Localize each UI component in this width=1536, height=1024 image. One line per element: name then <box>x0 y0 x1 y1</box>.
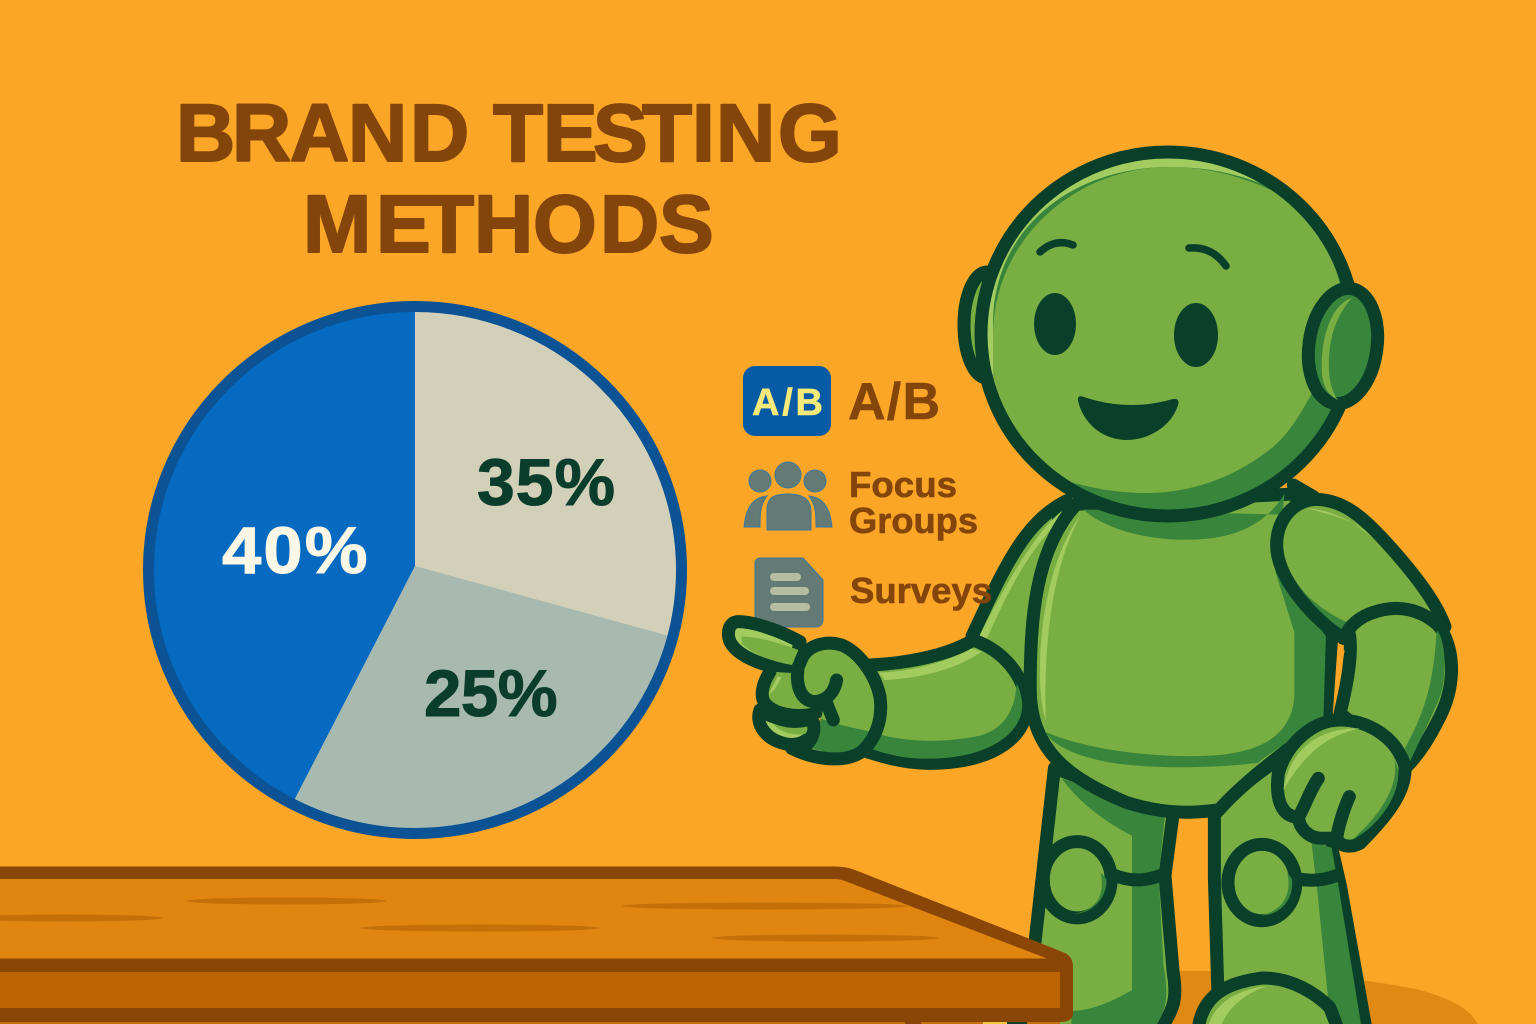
ring finger <box>759 710 814 744</box>
left ear <box>964 272 1010 378</box>
floor shadow <box>1130 971 1478 1024</box>
title: METHODS <box>303 179 714 270</box>
palm <box>792 643 881 759</box>
label: 40%: 40% <box>222 514 368 587</box>
resting hand <box>1277 720 1405 846</box>
right ear <box>1301 284 1385 408</box>
pointing arm and hand <box>728 622 1027 763</box>
icon: focus group people <box>744 462 832 530</box>
label: A/B: A/B <box>848 373 940 431</box>
robot character <box>728 140 1452 1024</box>
label: 35%: 35% <box>477 446 615 520</box>
left leg <box>1030 768 1175 1024</box>
label: Focus Groups: Focus <box>849 464 957 505</box>
face <box>993 167 1340 493</box>
slice: 25% <box>295 566 668 828</box>
pie chart <box>143 301 687 839</box>
right forearm <box>1340 608 1452 767</box>
shoulder strap <box>1293 485 1313 497</box>
head <box>980 140 1355 520</box>
table top <box>0 879 1047 958</box>
label: Surveys: Surveys <box>850 570 992 611</box>
mouth <box>1078 396 1178 440</box>
label: Focus Groups <box>849 464 978 541</box>
index finger <box>728 622 800 672</box>
right arm <box>1277 485 1452 846</box>
table front <box>0 972 1060 1008</box>
wood grain <box>0 898 938 942</box>
eyebrows <box>1040 243 1226 266</box>
table <box>0 866 1073 1024</box>
label: 25%: 25% <box>424 658 558 731</box>
label: Focus Groups: Groups <box>849 500 978 541</box>
icon: A/B badge <box>743 366 831 436</box>
gap between arm and torso <box>1338 648 1345 680</box>
icon: A/B badge: A/B <box>752 382 823 424</box>
right leg <box>1197 754 1367 1024</box>
slice: 40% <box>154 312 415 799</box>
icon: survey document <box>755 558 823 627</box>
right upper arm <box>1277 499 1445 638</box>
forearm <box>862 640 1027 763</box>
title: BRAND TESTING <box>176 88 842 179</box>
eyes <box>1034 293 1218 367</box>
middle finger <box>762 672 825 716</box>
robot body <box>972 494 1367 1024</box>
title <box>176 88 842 270</box>
left upper arm <box>972 501 1067 695</box>
torso <box>1030 494 1332 812</box>
